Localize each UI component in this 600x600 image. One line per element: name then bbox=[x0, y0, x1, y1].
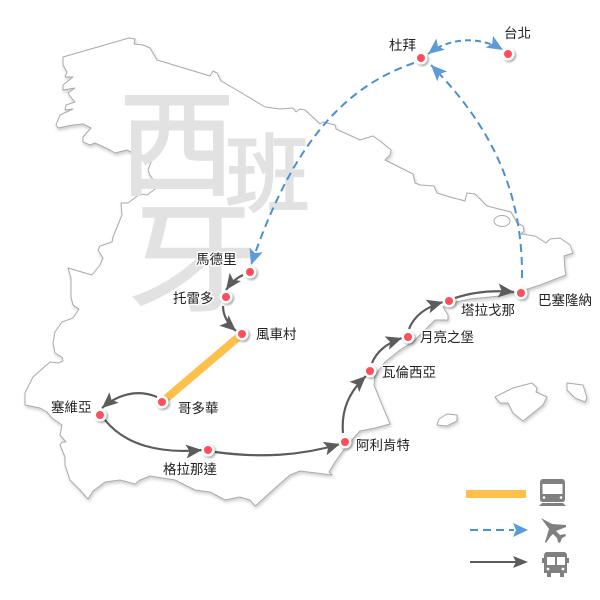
bus: Moon Castle to Tarragona bbox=[409, 302, 443, 329]
marker: Barcelona bbox=[516, 288, 526, 298]
label: 阿利肯特: 阿利肯特 bbox=[356, 438, 410, 453]
lake bbox=[494, 216, 510, 226]
island: Ibiza bbox=[437, 414, 457, 426]
island: Mallorca bbox=[495, 383, 547, 421]
island: Menorca bbox=[567, 383, 587, 402]
legend bbox=[466, 479, 569, 577]
bus: Alicante to Valencia bbox=[343, 376, 366, 433]
icon: train bbox=[539, 479, 566, 506]
marker: Dubai bbox=[416, 53, 426, 63]
marker: windmill village bbox=[237, 329, 247, 339]
bus routes bbox=[102, 275, 514, 455]
legend: flight line bbox=[470, 529, 514, 531]
city labels bbox=[51, 26, 592, 477]
legend: bus arrowhead bbox=[513, 556, 528, 568]
label: 巴塞隆納: 巴塞隆納 bbox=[538, 292, 592, 308]
icon: bus bbox=[542, 552, 569, 577]
label: 月亮之堡: 月亮之堡 bbox=[420, 329, 474, 345]
marker: Alicante bbox=[340, 437, 350, 447]
icon: airplane bbox=[541, 518, 566, 543]
bus: Madrid to Toledo bbox=[226, 275, 243, 290]
bus: Toledo to windmill village bbox=[223, 306, 236, 331]
title: 西班牙 bbox=[119, 81, 310, 327]
legend: bus line bbox=[470, 561, 516, 563]
marker: Taipei bbox=[503, 49, 513, 59]
marker: Granada bbox=[203, 445, 213, 455]
label: 杜拜: 杜拜 bbox=[389, 38, 416, 53]
city markers bbox=[95, 49, 526, 455]
label: 托雷多: 托雷多 bbox=[173, 291, 214, 306]
marker: Toledo bbox=[221, 292, 231, 302]
title character 西: 西 bbox=[119, 81, 235, 211]
legend: flight arrowhead bbox=[513, 523, 528, 537]
label: 格拉那達: 格拉那達 bbox=[163, 462, 217, 477]
label: 台北: 台北 bbox=[504, 26, 531, 41]
flight: Dubai to Madrid bbox=[251, 63, 414, 265]
label: 塞維亞: 塞維亞 bbox=[51, 399, 92, 415]
train route: windmill village to Cordoba bbox=[162, 334, 242, 402]
marker: Moon Castle bbox=[403, 332, 413, 342]
label: 瓦倫西亞: 瓦倫西亞 bbox=[382, 365, 436, 380]
marker: Seville bbox=[95, 410, 105, 420]
bus: Granada to Alicante bbox=[215, 444, 340, 455]
map of Spain bbox=[25, 38, 587, 506]
label: 塔拉戈那: 塔拉戈那 bbox=[461, 303, 515, 318]
label: 馬德里: 馬德里 bbox=[196, 252, 236, 267]
bus: Cordoba to Seville bbox=[102, 393, 157, 408]
bus: Tarragona to Barcelona bbox=[455, 291, 514, 298]
bus: Seville to Granada bbox=[105, 420, 202, 451]
flight: Barcelona to Dubai bbox=[431, 65, 522, 278]
mainland outline bbox=[25, 38, 573, 506]
bus: Valencia to Moon Castle bbox=[372, 338, 402, 363]
legend: train line bbox=[466, 490, 526, 498]
label: 哥多華: 哥多華 bbox=[178, 401, 218, 416]
flight: Taipei - Dubai bbox=[428, 40, 503, 54]
marker: Cordoba bbox=[157, 397, 167, 407]
title character 班: 班 bbox=[225, 129, 310, 224]
marker: Tarragona bbox=[444, 296, 454, 306]
marker: Madrid bbox=[245, 267, 255, 277]
marker: Valencia bbox=[365, 366, 375, 376]
title character 牙: 牙 bbox=[128, 195, 257, 327]
flight routes bbox=[251, 40, 522, 278]
label: 風車村: 風車村 bbox=[256, 327, 297, 342]
